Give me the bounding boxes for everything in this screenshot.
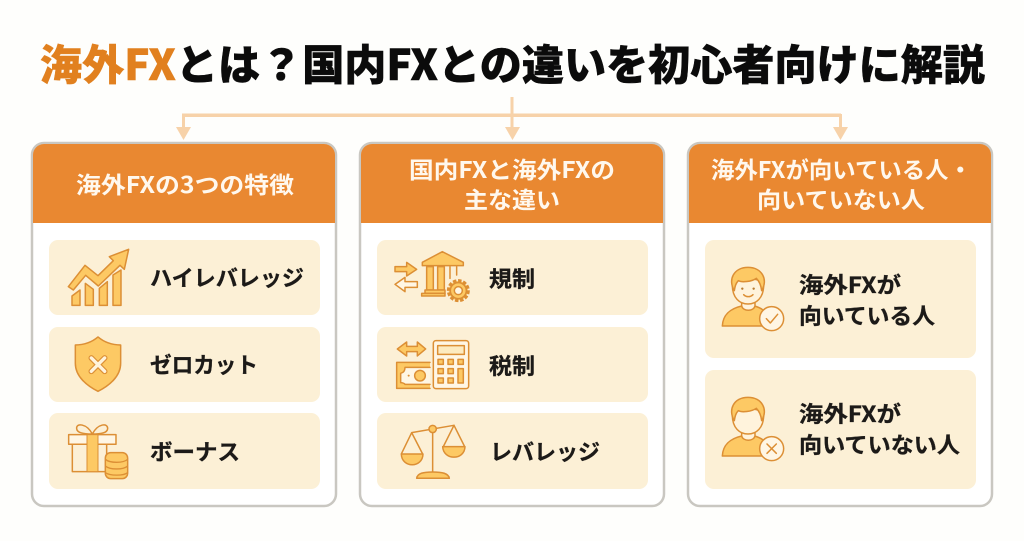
card: 規制: 規制: [489, 262, 535, 294]
arrow: connector from title to three panels: [176, 97, 848, 140]
panel header: differences: 主な違い: [464, 181, 560, 215]
panel: 国内FXと海外FXの主な違い: [360, 143, 664, 506]
card: 向いている人: 海外FXが: [799, 268, 901, 300]
icon: person with cross: [722, 397, 784, 461]
card: ボーナス: ボーナス: [150, 435, 240, 467]
icon: shield with cross: [75, 337, 121, 391]
card: 税制: [377, 327, 648, 402]
card: 向いている人: [705, 240, 976, 358]
panel header: suitability: 向いていない人: [757, 181, 925, 215]
card: ハイレバレッジ: [49, 240, 320, 315]
card: ボーナス: [49, 413, 320, 489]
card: ハイレバレッジ: ハイレバレッジ: [150, 261, 304, 293]
card: 向いていない人: 海外FXが: [799, 397, 901, 429]
panel header: suitability: [689, 144, 991, 223]
icon: rising chart: [68, 249, 129, 305]
panel: 海外FXの3つの特徴: [32, 143, 336, 506]
panel header: differences: 国内FXと海外FXの: [409, 151, 615, 185]
title: 海外FXとは？国内FXとの違いを初心者向けに解説: [40, 32, 985, 93]
icon: balance scale: [401, 425, 465, 478]
icon: bank, arrows and gear: [395, 252, 468, 300]
panel: 海外FXが向いている人・向いていない人: [688, 143, 992, 506]
card: レバレッジ: [377, 413, 648, 489]
card: 税制: 税制: [489, 349, 535, 381]
card: 向いている人: 向いている人: [799, 299, 935, 331]
card: レバレッジ: レバレッジ: [490, 435, 600, 467]
card: 向いていない人: 向いていない人: [799, 428, 960, 460]
panel header: suitability: 海外FXが向いている人・: [711, 151, 972, 185]
card: 向いていない人: [705, 370, 976, 489]
card: ゼロカット: [49, 327, 320, 402]
icon: money and calculator: [397, 341, 469, 389]
card: ゼロカット: ゼロカット: [150, 348, 258, 380]
panel header: features: [33, 144, 335, 223]
panel header: features: 海外FXの3つの特徴: [76, 166, 294, 200]
card: 規制: [377, 240, 648, 315]
panel header: differences: [361, 144, 663, 223]
icon: person with check: [722, 267, 784, 331]
icon: gift box and coins: [69, 425, 128, 479]
